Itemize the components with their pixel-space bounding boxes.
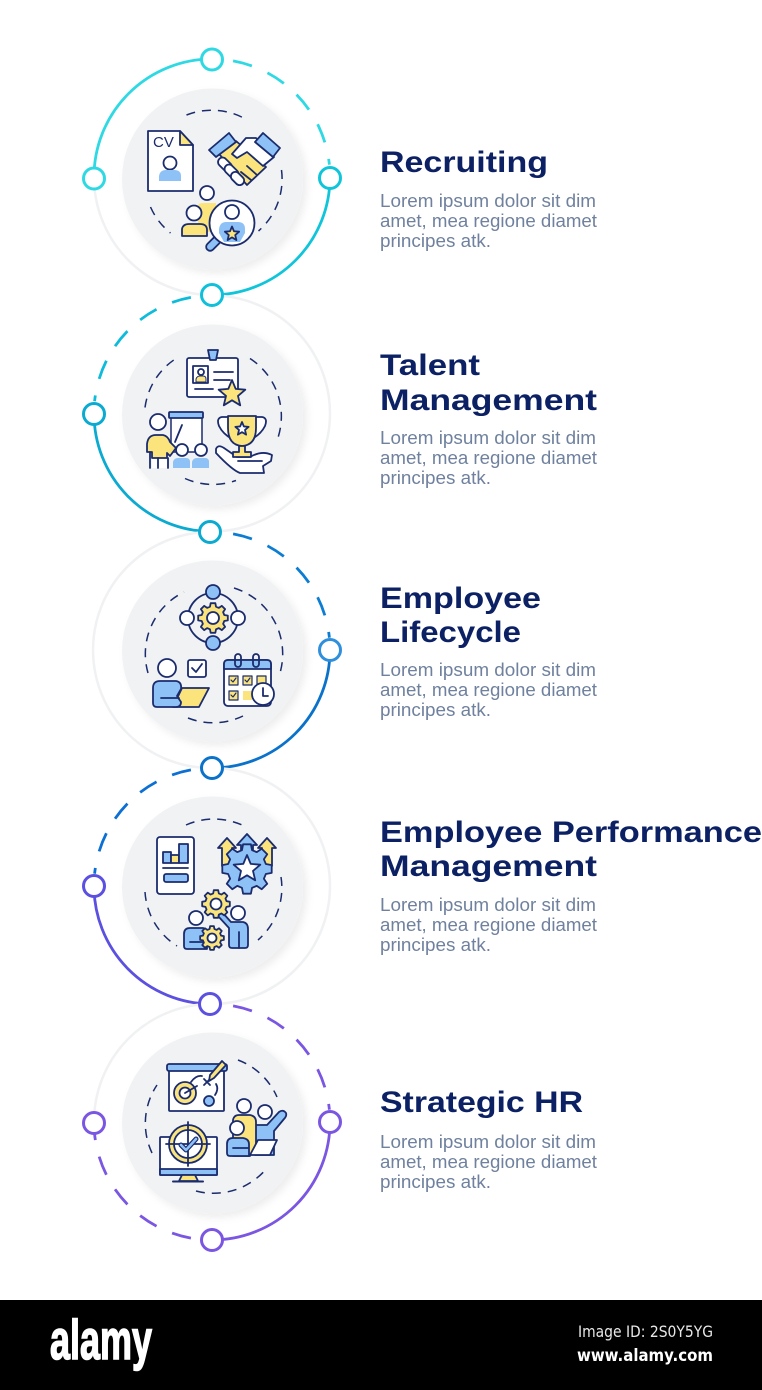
icon: report document: [157, 837, 194, 894]
text: Employee Performance Management: Management: [380, 850, 597, 883]
text: Strategic HR: amet, mea regione diamet: [380, 1152, 597, 1172]
footer image id: Image ID: 2S0Y5YG: [578, 1322, 713, 1341]
text: Talent Management: Talent: [380, 349, 480, 382]
text: Talent Management: [380, 349, 597, 488]
text: Recruiting: Recruiting: [380, 146, 548, 179]
icon: candidates with magnifier: [182, 186, 254, 252]
ring 2: [94, 296, 330, 532]
disc 1: [122, 88, 303, 270]
panel: step 4 Employee Performance Management: [94, 768, 762, 1004]
disc 3: [122, 560, 303, 742]
text: Talent Management: amet, mea regione diamet: [380, 448, 597, 468]
icon: presenter and audience: [147, 412, 209, 468]
text: Employee Performance Management: amet, mea regione diamet: [380, 915, 597, 935]
panel: step 3 Employee Lifecycle: [93, 532, 597, 768]
panel: step 5 Strategic HR: [94, 1004, 597, 1240]
icon: monitor with target: [160, 1122, 217, 1182]
ring 4: [94, 768, 330, 1004]
icon: handshake: [209, 133, 280, 187]
text: Strategic HR: Strategic HR: [380, 1086, 583, 1119]
ring 5: [94, 1004, 330, 1240]
footer logo: alamy: [50, 1308, 152, 1371]
footer bar: [0, 1300, 762, 1390]
footer url: www.alamy.com: [577, 1346, 713, 1365]
text: Recruiting: amet, mea regione diamet: [380, 211, 597, 231]
text: Employee Lifecycle: Lifecycle: [380, 616, 521, 649]
text: Strategic HR: [380, 1086, 597, 1192]
icon: gear with growth arrows: [218, 834, 276, 894]
icon: ID badge with star: [187, 350, 245, 405]
panel: step 1 Recruiting: [94, 59, 597, 295]
text: Recruiting: [380, 146, 597, 251]
text: Talent Management: Management: [380, 384, 597, 417]
icon: CV document: CV: [153, 134, 174, 151]
icon: trophy on hand: [216, 416, 272, 473]
disc 5: [122, 1032, 303, 1214]
icon: cycle with gear: [180, 585, 245, 650]
disc 4: [122, 796, 303, 978]
icon: CV document: [148, 131, 193, 191]
icon: person at laptop with checkbox: [153, 659, 209, 707]
text: Talent Management: principes atk.: [380, 468, 491, 488]
text: Employee Performance Management: Employee Performance: [380, 816, 762, 849]
text: Employee Performance Management: Lorem ipsum dolor sit dim: [380, 895, 596, 915]
text: Employee Performance Management: principes atk.: [380, 935, 491, 955]
icon: people with gears: [184, 890, 248, 950]
icon: team with laptop: [227, 1099, 286, 1156]
text: Employee Performance Management: [380, 816, 762, 955]
timeline nodes: [84, 49, 340, 1250]
icon: strategy board: [167, 1061, 227, 1111]
text: Strategic HR: principes atk.: [380, 1172, 491, 1192]
text: Recruiting: Lorem ipsum dolor sit dim: [380, 191, 596, 211]
text: Employee Lifecycle: Lorem ipsum dolor sit dim: [380, 660, 596, 680]
icon: calendar with clock: [224, 654, 274, 706]
panel: step 2 Talent Management: [94, 296, 597, 532]
text: Strategic HR: Lorem ipsum dolor sit dim: [380, 1132, 596, 1152]
text: Talent Management: Lorem ipsum dolor sit dim: [380, 428, 596, 448]
text: Employee Lifecycle: amet, mea regione diamet: [380, 680, 597, 700]
text: Employee Lifecycle: Employee: [380, 582, 541, 615]
text: Employee Lifecycle: principes atk.: [380, 700, 491, 720]
text: Recruiting: principes atk.: [380, 231, 491, 251]
ring 3: [93, 532, 330, 768]
text: Employee Lifecycle: [380, 582, 597, 720]
disc 2: [122, 324, 303, 506]
ring 1: [94, 59, 330, 295]
